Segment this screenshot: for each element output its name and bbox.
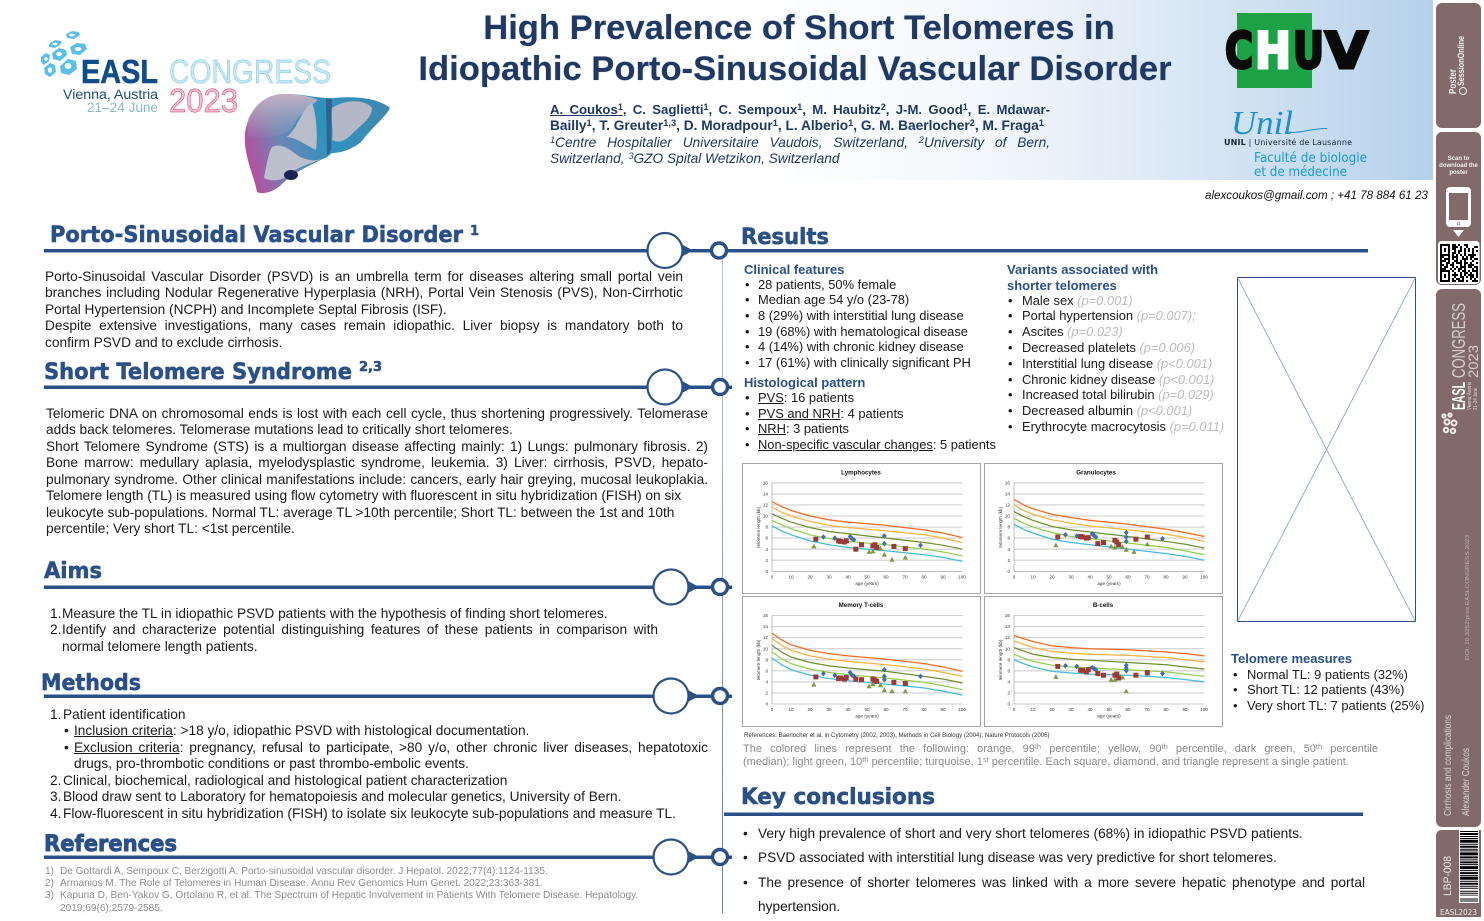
logo: UNIL Faculté de biologie et de médecine	[1224, 105, 1367, 180]
section heading: Methods: Methods	[41, 671, 141, 696]
chart: Memory T-cells: 4	[765, 680, 768, 684]
variants associated with shorter telomeres list: shorter telomeres	[1007, 278, 1117, 293]
clinical features list	[744, 262, 971, 370]
variants associated with shorter telomeres list: •	[1008, 308, 1013, 323]
variants associated with shorter telomeres list: Interstitial lung disease (p<0.001)	[1022, 356, 1212, 371]
text block: STS description: Bone marrow: medullary aplasia, myelodysplastic syndrome, leukemia. 3) Liver: cirrhosis, PSVD, hepato-	[46, 455, 708, 470]
variants associated with shorter telomeres list: Ascites (p=0.023)	[1022, 324, 1123, 339]
variants associated with shorter telomeres list: •	[1008, 356, 1013, 371]
telomere measures list: •	[1233, 667, 1238, 682]
authors and affiliations: Bailly1, T. Greuter1,3, D. Moradpour1, L. Alberio1, G. M. Baerlocher2, M. Fraga1	[550, 118, 1044, 133]
variants associated with shorter telomeres list: •	[1008, 419, 1013, 434]
chart: B-cells: 20	[1049, 707, 1055, 712]
text block: methods list: •	[64, 723, 69, 738]
clinical features list: •	[745, 324, 750, 339]
panel: scan QR to download: poster	[1449, 170, 1468, 176]
section heading: Results	[732, 225, 1368, 252]
clinical features list: •	[745, 292, 750, 307]
panel: EASL Congress session info	[1436, 289, 1481, 827]
text block: PSVD definition: branches including Nodular Regenerative Hyperplasia (NRH), Portal Vein Stenosis (PVS), Non-Cirrhotic	[45, 285, 683, 300]
text block: methods list: Inclusion criteria: >18 y/o, idiopathic PSVD with histological documentation.	[74, 723, 529, 738]
panel: abstract number and barcode: EASL2023	[1440, 908, 1477, 917]
QR code	[1438, 241, 1480, 284]
chart: Lymphocytes: 6	[765, 536, 768, 541]
logo: EASL Congress 2023: Vienna, Austria	[63, 87, 159, 102]
logo: CHUV	[1225, 13, 1370, 88]
chart: Granulocytes: 2	[1007, 558, 1010, 563]
authors and affiliations: 1Centre Hospitalier Universitaire Vaudois, Switzerland, 2University of Bern,	[550, 135, 1050, 150]
histological pattern list	[744, 375, 996, 452]
key conclusions list: •	[743, 875, 748, 890]
text block: PSVD definition: Porto-Sinusoidal Vascular Disorder (PSVD) is an umbrella term for diseases altering small portal vein	[45, 269, 683, 284]
text block: references list	[45, 866, 638, 914]
text block: methods list: drugs, pro-thrombotic conditions or past thrombo-embolic events.	[74, 756, 469, 771]
text block: methods list	[50, 707, 708, 821]
text block: STS description: Telomeric DNA on chromosomal ends is lost with each cell cycle, thus shortening progressively. Telomerase	[46, 406, 708, 421]
chart: Lymphocytes: 12	[763, 502, 768, 507]
panel: scan QR to download	[1436, 132, 1481, 285]
section heading: Key conclusions	[724, 785, 1363, 816]
chart: Granulocytes: 30	[1068, 574, 1074, 579]
variants associated with shorter telomeres list: Variants associated with	[1007, 262, 1158, 277]
logo: CHUV: U	[1293, 22, 1324, 80]
logo: EASL Congress 2023: 2023	[169, 82, 238, 118]
text block: STS description: Telomere length (TL) is measured using flow cytometry with fluorescent in situ hybridization (FISH) on six	[46, 488, 681, 503]
section heading: References: References	[44, 832, 177, 857]
logo: UNIL Faculté de biologie et de médecine: et de médecine	[1254, 165, 1347, 180]
key conclusions list: The presence of shorter telomeres was linked with a more severe hepatic phenotype and portal	[758, 875, 1365, 890]
chart: Lymphocytes: 14	[763, 491, 768, 496]
chart: Memory T-cells: 0	[765, 702, 768, 707]
chart: Granulocytes: 14	[1005, 491, 1010, 496]
chart: Memory T-cells: 40	[845, 707, 851, 712]
chart: Granulocytes: 0	[1007, 569, 1010, 574]
chart: Granulocytes: 70	[1144, 574, 1150, 579]
chart: Granulocytes: 4	[1007, 547, 1010, 552]
chart: B-cells	[984, 596, 1222, 726]
telomere measures list: Very short TL: 7 patients (25%)	[1247, 698, 1424, 713]
clinical features list: •	[745, 277, 750, 292]
icon: smartphone	[1446, 187, 1471, 237]
chart: B-cells: telomere length (kb)	[998, 639, 1003, 680]
telomere measures list: •	[1233, 682, 1238, 697]
chart: Lymphocytes: 0	[765, 569, 768, 574]
logo: CHUV: V	[1325, 22, 1368, 80]
title	[418, 9, 1172, 88]
key conclusions list: Very high prevalence of short and very short telomeres (68%) in idiopathic PSVD patients.	[758, 826, 1303, 841]
clinical features list: 17 (61%) with clinically significant PH	[758, 355, 971, 370]
panel: Poster Session Online: Poster	[1448, 69, 1459, 94]
chart: Memory T-cells: 90	[940, 707, 946, 712]
telomere length charts	[742, 463, 1223, 727]
text block: references list: De Gottardi A, Sempoux C, Berzigotti A. Porto-sinusoidal vascular disorder. J Hepatol. 2022;77(4):1124-1135.	[60, 866, 548, 876]
chart: Granulocytes: 50	[1106, 574, 1112, 579]
text block: references list: 2019;69(6):2579-2585.	[60, 903, 163, 914]
chart: B-cells: 12	[1005, 635, 1010, 640]
panel: EASL Congress session info: 21–24 June	[1473, 388, 1479, 410]
chart: B-cells: 40	[1087, 707, 1093, 712]
chart: Granulocytes	[984, 464, 1222, 594]
chart: Lymphocytes: 10	[788, 574, 794, 579]
chart: Lymphocytes: 80	[921, 574, 927, 579]
text block: references list: Armanios M. The Role of Telomeres in Human Disease. Annu Rev Genomics Hum Genet. 2022;23:363-381.	[60, 878, 543, 889]
panel: Poster Session Online	[1436, 3, 1481, 128]
text block: STS description: leukocyte sub-populations. Normal TL: average TL >10th percentile; Short TL: between the 1st and 10th	[46, 505, 674, 520]
section heading: Short Telomere Syndrome: Short Telomere Syndrome	[44, 360, 352, 385]
chart: B-cells: 60	[1125, 707, 1131, 712]
clinical features list: 4 (14%) with chronic kidney disease	[758, 339, 964, 354]
image placeholder	[1237, 277, 1416, 622]
key conclusions list	[743, 826, 1365, 914]
panel: EASL Congress session info: EASL	[1449, 382, 1469, 410]
key conclusions list: •	[743, 850, 748, 865]
telomere measures list	[1231, 651, 1424, 713]
chart: Memory T-cells: 10	[788, 707, 794, 712]
chart: B-cells: age (years)	[1097, 714, 1121, 718]
text block: methods list: Flow-fluorescent in situ hybridization (FISH) to isolate six leukocyte sub-populations and measure TL.	[63, 806, 676, 821]
chart: Memory T-cells: 12	[763, 635, 768, 640]
panel: EASL Congress session info: 2023	[1465, 345, 1481, 378]
chart: Lymphocytes: 2	[765, 558, 768, 563]
chart: Memory T-cells: 50	[864, 707, 870, 712]
text block: aims list: 1.	[50, 606, 61, 621]
histological pattern list: PVS: 16 patients	[758, 390, 854, 405]
chart: Lymphocytes: 70	[902, 574, 908, 579]
chart: B-cells: 70	[1144, 707, 1150, 712]
text block: aims list: Measure the TL in idiopathic PSVD patients with the hypothesis of finding short telomeres.	[62, 606, 608, 621]
chart: Granulocytes: 20	[1049, 574, 1055, 579]
chart: B-cells: 8	[1007, 657, 1010, 662]
chart: B-cells: 6	[1007, 668, 1010, 673]
chart: Lymphocytes: 20	[807, 574, 813, 579]
chart: B-cells: 16	[1005, 613, 1010, 618]
variants associated with shorter telomeres list: Chronic kidney disease (p<0.001)	[1022, 372, 1214, 387]
text block: methods list: 2.	[50, 773, 61, 788]
chart: B-cells: 30	[1068, 707, 1074, 712]
chart references: References: Baerlocher et al. in Cytometry (2002, 2003), Methods in Cell Biology (2004), Nature Protocols (2006)	[744, 732, 1050, 739]
histological pattern list: •	[745, 406, 750, 421]
chart: Memory T-cells: 80	[921, 707, 927, 712]
text block: references list: Kapuria D, Ben-Yakov G, Ortolano R, et al. The Spectrum of Hepatic Involvement in Patients With Telomere Disease. Hepatology.	[60, 890, 638, 901]
logo: CHUV: C	[1225, 22, 1253, 80]
chart: Memory T-cells: 8	[765, 657, 768, 662]
chart: B-cells: 14	[1005, 624, 1010, 629]
text block: methods list: 1.	[50, 707, 61, 722]
text block: STS description	[46, 406, 708, 536]
telomere measures list: Telomere measures	[1231, 651, 1352, 666]
logo: CHUV: H	[1255, 22, 1291, 80]
key conclusions list: •	[743, 826, 748, 841]
chart: Memory T-cells: 20	[807, 707, 813, 712]
histological pattern list: •	[745, 390, 750, 405]
chart: Lymphocytes: 0	[771, 574, 774, 579]
chart: Granulocytes: 40	[1087, 574, 1093, 579]
variants associated with shorter telomeres list: Male sex (p=0.001)	[1022, 293, 1133, 308]
chart: Lymphocytes: 8	[765, 525, 768, 530]
section heading: Aims	[44, 559, 732, 606]
side bar: poster session panels	[1436, 3, 1481, 917]
chart: Memory T-cells: 10	[763, 646, 768, 651]
section heading: Short Telomere Syndrome	[44, 360, 732, 406]
panel: scan QR to download: Scan to	[1448, 156, 1470, 162]
chart: Lymphocytes: 30	[826, 574, 832, 579]
clinical features list: 19 (68%) with hematological disease	[758, 324, 968, 339]
text block: STS description: adds back telomeres. Telomerase mutations lead to critically short telomeres.	[46, 422, 513, 437]
telomere measures list: Normal TL: 9 patients (32%)	[1247, 667, 1408, 682]
chart: Granulocytes: 90	[1182, 574, 1188, 579]
chart: Lymphocytes: 90	[940, 574, 946, 579]
chart: Lymphocytes	[742, 464, 980, 594]
chart: Lymphocytes: 50	[864, 574, 870, 579]
variants associated with shorter telomeres list: Decreased albumin (p<0.001)	[1022, 403, 1192, 418]
panel: EASL Congress session info: Vienna, Austria	[1467, 382, 1473, 410]
chart: B-cells: 0	[1007, 702, 1010, 707]
chart: Granulocytes: 0	[1013, 574, 1016, 579]
chart: B-cells: 2	[1007, 690, 1010, 696]
text block: references list: 1)	[45, 866, 54, 876]
header gradient band	[0, 0, 1433, 180]
text block: aims list: normal telomere length patients.	[62, 639, 258, 654]
chart: Lymphocytes: 60	[883, 574, 889, 579]
title: Idiopathic Porto-Sinusoidal Vascular Disorder	[418, 50, 1172, 88]
chart: Lymphocytes: Lymphocytes	[841, 470, 881, 476]
variants associated with shorter telomeres list	[1007, 262, 1224, 434]
section heading: Key conclusions: Key conclusions	[741, 785, 935, 810]
chart: B-cells: 50	[1106, 707, 1112, 712]
chart: B-cells: 90	[1182, 707, 1188, 712]
key conclusions list: PSVD associated with interstitial lung disease was very predictive for short telomeres.	[758, 850, 1277, 865]
text block: references list: 2)	[45, 878, 54, 889]
chart: Granulocytes: 80	[1163, 574, 1169, 579]
chart: Memory T-cells: 30	[826, 707, 832, 712]
chart: Granulocytes: 16	[1005, 480, 1010, 485]
key conclusions list: hypertension.	[758, 899, 840, 914]
text block: methods list: Clinical, biochemical, radiological and histological patient characterization	[63, 773, 507, 788]
chart: Granulocytes: 12	[1005, 502, 1010, 507]
chart: B-cells: 10	[1030, 707, 1036, 712]
chart: Memory T-cells: 70	[902, 707, 908, 712]
chart: Lymphocytes: age (years)	[855, 581, 879, 586]
text block: aims list: Identify and characterize potential distinguishing features of these patients in comparison with	[62, 622, 658, 637]
chart: Granulocytes: 8	[1007, 525, 1010, 530]
chart: Granulocytes: 6	[1007, 536, 1010, 541]
timeline vertical rule	[722, 258, 723, 913]
text block: STS description: pulmonary syndrome. Other clinical manifestations include: cancers, early hair greying, mucosal leukoplakia.	[46, 472, 708, 487]
chart: Memory T-cells: telomere length (kb)	[756, 639, 761, 680]
variants associated with shorter telomeres list: •	[1008, 387, 1013, 402]
section heading: Short Telomere Syndrome: 2,3	[359, 360, 382, 375]
chart: Granulocytes: 100	[1200, 574, 1208, 579]
chart: Granulocytes: Granulocytes	[1076, 470, 1116, 476]
text block: methods list: 3.	[50, 789, 61, 804]
histological pattern list: Histological pattern	[744, 375, 865, 390]
clinical features list: Clinical features	[744, 262, 844, 277]
chart: Granulocytes: 10	[1030, 574, 1036, 579]
chart: Memory T-cells: 16	[763, 613, 768, 618]
clinical features list: 28 patients, 50% female	[758, 277, 896, 292]
panel: abstract number and barcode	[1436, 830, 1481, 917]
variants associated with shorter telomeres list: Decreased platelets (p=0.006)	[1022, 340, 1195, 355]
chart: B-cells: 10	[1005, 646, 1010, 651]
chart: Lymphocytes: 100	[958, 574, 966, 579]
variants associated with shorter telomeres list: •	[1008, 403, 1013, 418]
panel: scan QR to download: download the	[1439, 163, 1478, 169]
text block: PSVD definition: confirm PSVD and to exclude cirrhosis.	[45, 335, 282, 350]
variants associated with shorter telomeres list: Portal hypertension (p=0.007);	[1022, 308, 1196, 323]
illustration: liver	[244, 94, 390, 194]
chart: Memory T-cells: 14	[763, 624, 768, 629]
text block: STS description: percentile; Very short TL: <1st percentile.	[46, 521, 295, 536]
chart legend note: The colored lines represent the following: orange, 99th percentile; yellow, 90th percentile, dark green, 50th percentile	[743, 742, 1378, 755]
histological pattern list: Non-specific vascular changes: 5 patients	[758, 437, 996, 452]
chart: Lymphocytes: 10	[763, 514, 768, 519]
chart: Granulocytes: 60	[1125, 574, 1131, 579]
chart: Lymphocytes: 4	[765, 547, 768, 552]
clinical features list: •	[745, 339, 750, 354]
panel: EASL Congress session info: DOI: 10.3252/pres.EASLCONGRESS.2023	[1465, 535, 1471, 660]
authors and affiliations	[550, 102, 1050, 166]
clinical features list: •	[745, 355, 750, 370]
variants associated with shorter telomeres list: •	[1008, 293, 1013, 308]
logo: EASL Congress 2023: 21–24 June	[87, 100, 158, 115]
panel: EASL Congress session info: CONGRESS	[1449, 303, 1469, 378]
chart: B-cells: 4	[1007, 680, 1010, 684]
chart: Granulocytes: telomere length (kb)	[998, 506, 1003, 548]
title: High Prevalence of Short Telomeres in	[483, 9, 1115, 47]
chart: Lymphocytes: 40	[845, 574, 851, 579]
text block: methods list: Patient identification	[63, 707, 186, 722]
text block: aims list: 2.	[50, 622, 61, 637]
text block: methods list: Blood draw sent to Laboratory for hematopoiesis and molecular genetics, University of Bern.	[63, 789, 621, 804]
panel: EASL Congress session info: Cirrhosis and complications	[1442, 715, 1454, 816]
chart: Granulocytes: 10	[1005, 514, 1010, 519]
text block: methods list: •	[64, 740, 69, 755]
chart: Lymphocytes: 16	[763, 480, 768, 485]
panel: Poster Session Online: SessionOnline	[1456, 36, 1466, 86]
panel: abstract number and barcode: LBP-008	[1442, 856, 1454, 896]
section heading: Methods	[41, 671, 732, 715]
variants associated with shorter telomeres list: •	[1008, 324, 1013, 339]
chart legend note: (median); light green, 10th percentile; turquoise, 1st percentile. Each square, diamond, and triangle represent a single patient.	[743, 755, 1349, 768]
text block: PSVD definition	[45, 269, 683, 350]
text block: PSVD definition: Portal Hypertension (NCPH) and Incomplete Septal Fibrosis (ISF).	[45, 302, 447, 317]
chart: Memory T-cells	[742, 596, 980, 726]
text block: STS description: Short Telomere Syndrome (STS) is a multiorgan disease affecting mainly: 1) Lungs: pulmonary fibrosis. 2)	[46, 439, 708, 454]
chart: B-cells: B-cells	[1093, 602, 1114, 609]
chart: Lymphocytes: telomere length (kb)	[756, 506, 761, 548]
chart: B-cells: 0	[1013, 707, 1016, 712]
telomere measures list: Short TL: 12 patients (43%)	[1247, 682, 1404, 697]
authors and affiliations: Switzerland, 3GZO Spital Wetzikon, Switzerland	[550, 151, 839, 166]
telomere measures list: •	[1233, 698, 1238, 713]
section heading: Porto-Sinusoidal Vascular Disorder: 1	[470, 224, 479, 239]
chart: Memory T-cells: 100	[958, 707, 966, 712]
variants associated with shorter telomeres list: •	[1008, 340, 1013, 355]
clinical features list: 8 (29%) with interstitial lung disease	[758, 308, 964, 323]
chart: Memory T-cells: 2	[765, 690, 768, 696]
logo: UNIL Faculté de biologie et de médecine: UNIL | Université de Lausanne	[1224, 137, 1352, 147]
chart: Memory T-cells: 0	[771, 707, 774, 712]
chart: Memory T-cells: 6	[765, 668, 768, 673]
chart: B-cells: 100	[1200, 707, 1208, 712]
text block: methods list: Exclusion criteria: pregnancy, refusal to participate, >80 y/o, other chronic liver diseases, hepatotoxic	[74, 740, 708, 755]
section heading: Results: Results	[741, 225, 829, 250]
section heading: Porto-Sinusoidal Vascular Disorder: Porto-Sinusoidal Vascular Disorder	[50, 223, 463, 248]
variants associated with shorter telomeres list: •	[1008, 372, 1013, 387]
contact details: alexcoukos@gmail.com ; +41 78 884 61 23	[1205, 189, 1428, 202]
chart: Granulocytes: age (years)	[1097, 581, 1121, 586]
histological pattern list: •	[745, 421, 750, 436]
histological pattern list: •	[745, 437, 750, 452]
chart: Memory T-cells: age (years)	[855, 714, 879, 718]
authors and affiliations: A. Coukos1, C. Saglietti1, C. Sempoux1, M. Haubitz2, J-M. Good1, E. Mdawar-	[550, 102, 1050, 117]
clinical features list: Median age 54 y/o (23-78)	[758, 292, 909, 307]
section heading: References	[44, 832, 732, 876]
logo: EASL Congress 2023: EASL	[81, 53, 158, 90]
text block: references list: 3)	[45, 890, 54, 901]
chart: B-cells: 80	[1163, 707, 1169, 712]
text block: PSVD definition: Despite extensive investigations, many cases remain idiopathic. Liver biopsy is mandatory both to	[45, 318, 683, 333]
panel: EASL Congress session info: Alexander Coukos	[1460, 748, 1472, 816]
clinical features list: •	[745, 308, 750, 323]
text block: aims list	[50, 606, 658, 654]
chart: Memory T-cells: Memory T-cells	[839, 602, 884, 609]
variants associated with shorter telomeres list: Increased total bilirubin (p=0.029)	[1022, 387, 1214, 402]
histological pattern list: NRH: 3 patients	[758, 421, 849, 436]
histological pattern list: PVS and NRH: 4 patients	[758, 406, 903, 421]
logo: UNIL Faculté de biologie et de médecine: Unil	[1231, 105, 1293, 142]
variants associated with shorter telomeres list: Erythrocyte macrocytosis (p=0.011)	[1022, 419, 1224, 434]
logo: EASL Congress 2023	[41, 31, 331, 118]
section heading: Porto-Sinusoidal Vascular Disorder	[44, 223, 728, 270]
section heading: Aims: Aims	[44, 559, 102, 584]
chart: Memory T-cells: 60	[883, 707, 889, 712]
chart legend note	[743, 742, 1378, 768]
text block: methods list: 4.	[50, 806, 61, 821]
